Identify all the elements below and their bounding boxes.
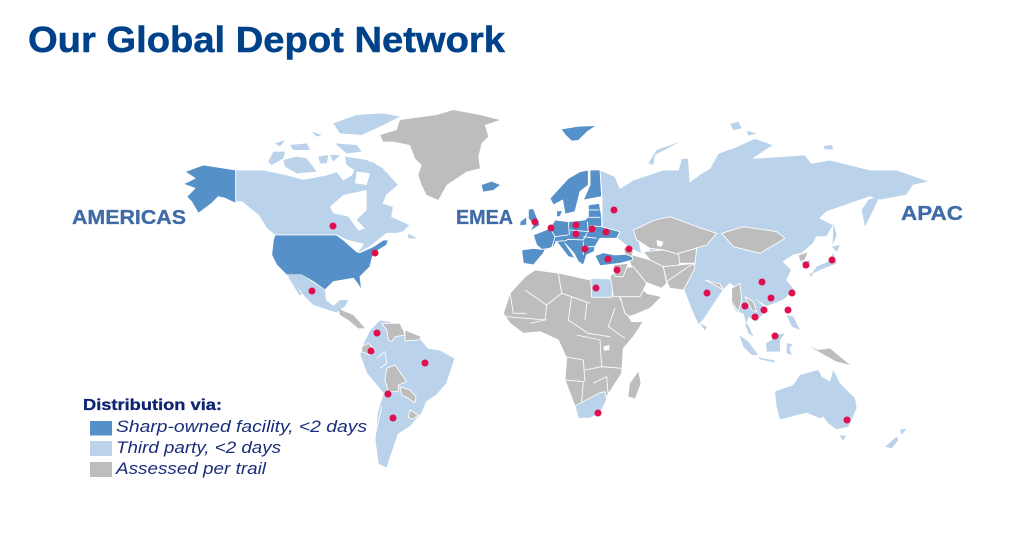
map region: Central and South America [287,275,455,468]
legend [83,397,368,478]
legend heading: Distribution via: [83,397,222,414]
label: EMEA: EMEA [456,207,513,229]
map region: Australia and Oceania [739,333,907,448]
title: Our Global Depot Network [28,19,506,60]
map region: Asia and Russia [600,122,930,337]
map region: Europe and Middle East [520,126,647,297]
label: APAC: APAC [901,203,963,225]
label: AMERICAS: AMERICAS [72,207,186,229]
map region: Africa [503,270,662,418]
legend item: Sharp-owned facility: Sharp-owned facility, <2 days [116,417,368,436]
map region: North America [183,110,500,290]
legend item: Third party: Third party, <2 days [116,438,282,457]
distribution depot markers [308,206,850,424]
legend item: Assessed per trail: Assessed per trail [115,459,267,478]
world map [183,110,930,468]
